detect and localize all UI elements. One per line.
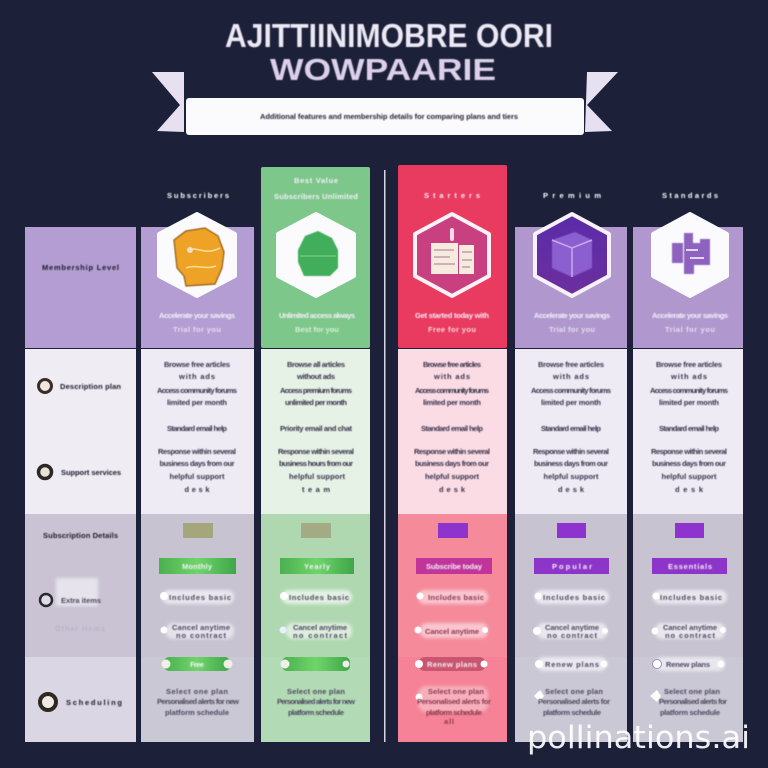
benefits text: Access community forums <box>650 386 728 395</box>
benefits text: Browse free articles <box>656 360 722 369</box>
tagline <box>279 311 355 334</box>
feature line 2 <box>652 623 726 640</box>
benefits text: Standard email help <box>421 424 483 433</box>
icon: document hexagon <box>415 214 489 296</box>
notes text <box>534 687 610 717</box>
icon: green hexagon <box>278 214 354 296</box>
notes text: platform schedule <box>165 708 229 717</box>
benefits text: Priority email and chat <box>280 424 352 433</box>
row label: extras: Other items <box>55 624 105 633</box>
row label: features: Membership Level <box>42 263 119 272</box>
benefits text: Response within several <box>414 447 490 456</box>
benefits text: Standard email help <box>659 424 719 433</box>
benefits text <box>414 360 490 494</box>
icon: white hexagon <box>653 214 727 296</box>
price bar: Popular <box>552 562 592 571</box>
tagline <box>652 311 728 334</box>
tagline: Trial for you <box>665 325 715 334</box>
benefits text: desk <box>184 485 210 494</box>
benefits text: with ads <box>552 372 589 381</box>
panel: column 5 purple <box>633 191 743 742</box>
row label: benefits: Description plan <box>60 382 121 391</box>
notes text: Select one plan <box>545 687 603 696</box>
feature line 1: Includes basic <box>543 593 605 602</box>
benefits text: business days from our <box>534 459 608 468</box>
notes text: Personalised alerts for <box>659 697 727 706</box>
price swatch <box>675 523 704 538</box>
notes text: all <box>444 717 454 726</box>
price swatch <box>438 523 468 538</box>
benefits text: business hours from our <box>279 459 353 468</box>
column heading: Starters <box>424 191 480 200</box>
benefits text: helpful support <box>170 472 225 481</box>
column heading: Subscribers Unlimited <box>274 192 358 201</box>
price bar: Monthly <box>182 562 213 571</box>
icon: purple hexagon <box>535 214 609 296</box>
notes text: Select one plan <box>664 687 720 696</box>
notes text: Select one plan <box>166 687 228 696</box>
notes text: platform schedule <box>288 708 344 717</box>
tagline <box>415 311 489 334</box>
benefits text: desk <box>558 485 585 494</box>
notes text <box>157 687 239 717</box>
benefits text <box>157 360 237 494</box>
title: AJITTIINIMOBRE OORI <box>225 17 553 54</box>
benefits text: Standard email help <box>541 424 601 433</box>
column heading <box>274 176 358 201</box>
pill <box>652 657 725 671</box>
pill <box>415 657 488 671</box>
column heading: Best Value <box>294 176 338 185</box>
tagline: Accelerate your savings <box>159 311 235 320</box>
tagline: Get started today with <box>415 311 489 320</box>
panel: column 2 green <box>261 167 370 742</box>
benefits text: limited per month <box>423 398 481 407</box>
row label: notes <box>40 694 122 710</box>
benefits text: Response within several <box>533 447 609 456</box>
feature line 1: Includes basic <box>428 593 484 602</box>
price bar <box>280 558 354 574</box>
benefits text: business days from our <box>415 459 489 468</box>
column heading: Standards <box>662 191 718 200</box>
benefits text: without ads <box>296 372 335 381</box>
notes text: Personalised alerts for new <box>157 697 239 706</box>
feature line 2 <box>280 623 352 640</box>
benefits text: Access community forums <box>531 386 611 395</box>
feature line 2 <box>533 623 608 640</box>
title: WOWPAARIE <box>270 52 496 87</box>
icon: orange hexagon <box>159 214 235 296</box>
benefits text: Access premium forums <box>280 386 352 395</box>
notes text: platform schedule <box>543 708 601 717</box>
subtitle: Additional features and membership details for comparing plans and tiers <box>260 112 518 121</box>
feature line 1 <box>416 590 488 604</box>
benefits text: Browse free articles <box>423 360 481 369</box>
feature line 1 <box>280 590 352 604</box>
benefits text <box>531 360 611 494</box>
tagline: Trial for you <box>549 325 595 334</box>
benefits text: business days from our <box>652 459 726 468</box>
feature line 2: Cancel anytime <box>545 623 599 632</box>
pill: Renew plans <box>666 660 710 669</box>
price swatch <box>557 523 586 538</box>
feature line 1: Includes basic <box>169 593 231 602</box>
pill: Free <box>190 660 204 669</box>
benefits text: with ads <box>433 372 470 381</box>
benefits text: limited per month <box>659 398 719 407</box>
feature line 2: no contract <box>665 631 716 640</box>
feature line 2: Cancel anytime <box>293 623 347 632</box>
price bar: Yearly <box>304 562 331 571</box>
tagline: Unlimited access always <box>279 311 355 320</box>
feature line 2: no contract <box>176 631 226 640</box>
price bar <box>534 558 609 574</box>
pill <box>535 657 608 671</box>
benefits text: with ads <box>178 372 215 381</box>
row label: notes: Scheduling <box>66 698 122 707</box>
benefits text: Browse all articles <box>287 360 345 369</box>
tagline: Best for you <box>295 325 339 334</box>
price swatch <box>183 523 213 538</box>
feature line 2 <box>414 623 488 638</box>
feature line 2: no contract <box>547 631 598 640</box>
pill <box>162 657 232 671</box>
feature line 2: Cancel anytime <box>425 627 479 636</box>
feature line 2: Cancel anytime <box>172 623 230 632</box>
column heading: Premium <box>543 191 601 200</box>
panel: row labels column <box>25 227 136 742</box>
tagline: Trial for you <box>173 325 221 334</box>
benefits text: limited per month <box>541 398 601 407</box>
ribbon banner <box>152 72 618 135</box>
panel: column 1 purple <box>141 191 254 742</box>
feature line 2: no contract <box>293 631 348 640</box>
title <box>225 17 553 87</box>
feature line 1 <box>652 590 727 604</box>
benefits text <box>650 360 728 494</box>
price bar <box>652 558 727 574</box>
tagline: Accelerate your savings <box>534 311 610 320</box>
benefits text: limited per month <box>167 398 227 407</box>
feature line 1 <box>534 590 609 604</box>
benefits text: Response within several <box>651 447 727 456</box>
price swatch <box>301 523 331 538</box>
notes text: Select one plan <box>428 687 484 696</box>
tagline: Free for you <box>428 325 476 334</box>
pill <box>280 657 350 671</box>
panel: column 4 purple <box>515 191 627 742</box>
feature line 2: Cancel anytime <box>663 623 717 632</box>
benefits text: Response within several <box>278 447 354 456</box>
benefits text: helpful support <box>289 472 346 481</box>
row label: extras: Extra items <box>61 596 101 605</box>
benefits text: Response within several <box>158 447 236 456</box>
benefits text: business days from our <box>160 459 235 468</box>
benefits text: Browse free articles <box>538 360 604 369</box>
feature line 1: Includes basic <box>660 593 722 602</box>
price bar: Subscribe today <box>426 562 483 571</box>
benefits text: team <box>302 485 330 494</box>
feature line 1 <box>160 590 234 604</box>
row label: extras <box>40 578 105 633</box>
notes text: Personalised alerts for new <box>277 697 355 706</box>
notes text: Personalised alerts for <box>417 697 491 706</box>
panel: column 3 red <box>398 165 507 742</box>
notes text <box>277 687 355 717</box>
row label: pricing: Subscription Details <box>43 531 118 540</box>
row label: benefits <box>38 380 121 392</box>
benefits text <box>278 360 354 494</box>
benefits text: desk <box>675 485 704 494</box>
benefits text: helpful support <box>662 472 717 481</box>
benefits text: Browse free articles <box>164 360 230 369</box>
feature line 2 <box>160 623 234 640</box>
benefits text: unlimited per month <box>285 398 347 407</box>
row label: services <box>38 466 121 478</box>
tagline <box>159 311 235 334</box>
notes text: Personalised alerts for <box>538 697 610 706</box>
column heading: Subscribers <box>167 191 229 200</box>
vertical divider <box>384 170 386 742</box>
notes text: platform schedule <box>660 708 720 717</box>
benefits text: Access community forums <box>415 386 489 395</box>
benefits text: helpful support <box>425 472 480 481</box>
notes text: platform schedule <box>426 708 482 717</box>
price bar <box>159 558 236 574</box>
price bar: Essentials <box>668 562 712 571</box>
feature line 1: Includes basic <box>289 593 349 602</box>
pill: Renew plans <box>427 660 477 669</box>
notes text <box>650 687 727 717</box>
benefits text: Access community forums <box>157 386 237 395</box>
row label: services: Support services <box>61 468 121 477</box>
pill: Renew plans <box>545 660 599 669</box>
watermark: pollinations.ai <box>527 720 750 756</box>
tagline: Accelerate your savings <box>652 311 728 320</box>
notes text <box>416 686 491 726</box>
price bar <box>416 558 492 574</box>
notes text: Select one plan <box>287 687 345 696</box>
benefits text: desk <box>439 485 466 494</box>
tagline <box>534 311 610 334</box>
benefits text: helpful support <box>544 472 599 481</box>
benefits text: Standard email help <box>167 424 227 433</box>
benefits text: with ads <box>670 372 707 381</box>
